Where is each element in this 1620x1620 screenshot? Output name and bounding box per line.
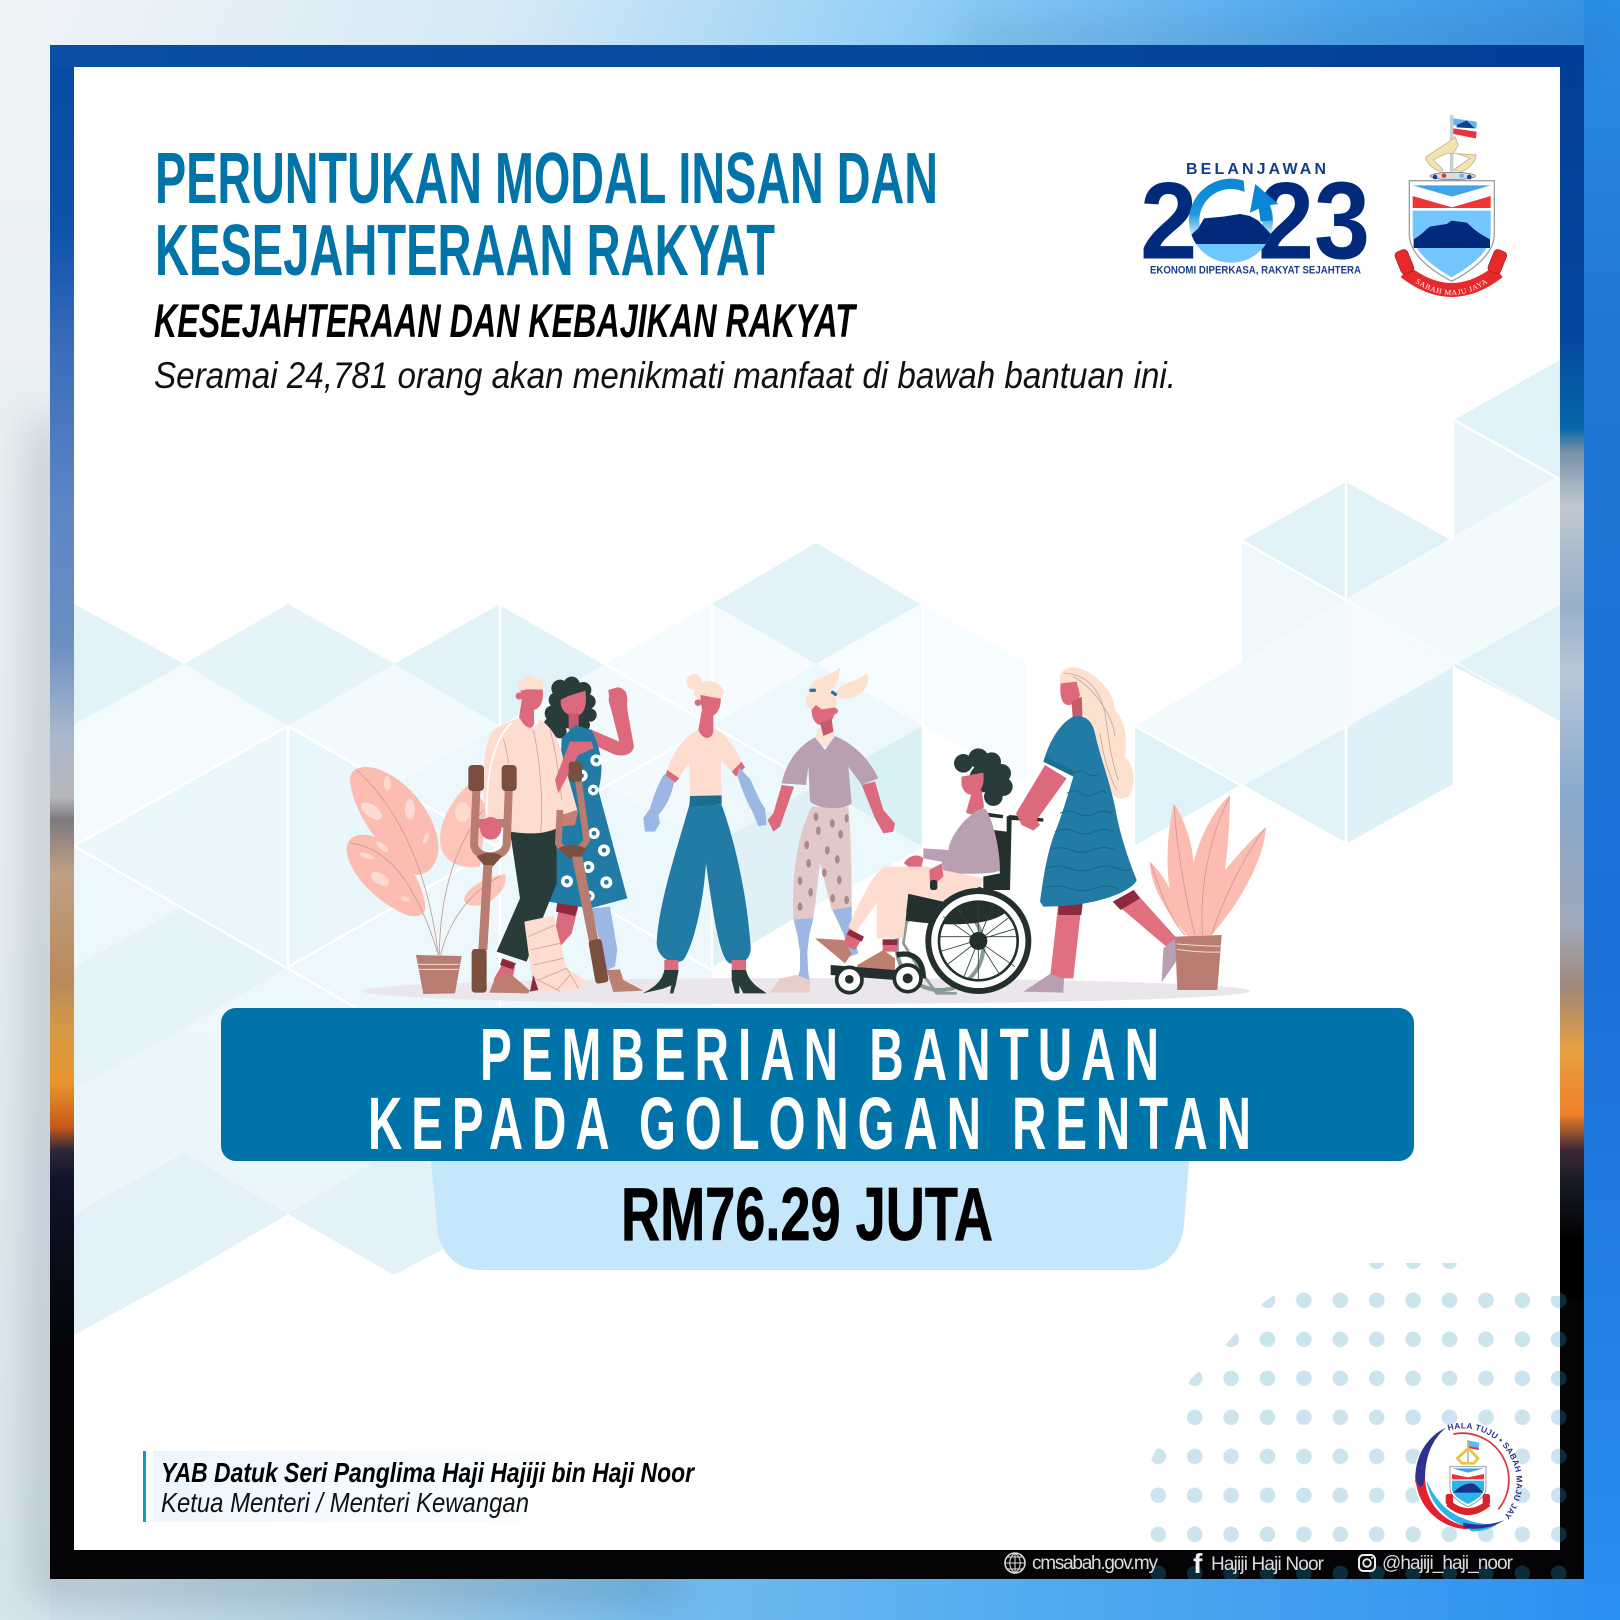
- footer: website: cmsabah.gov.my: [1032, 1553, 1158, 1574]
- dot pattern: [1140, 1263, 1560, 1550]
- signature block: [143, 1451, 696, 1522]
- illustration: left plant: [347, 767, 506, 994]
- title: KESEJAHTERAAN RAKYAT: [155, 211, 775, 291]
- logo: Sabah coat of arms: [1394, 115, 1507, 297]
- hexagon pattern background: [74, 360, 1560, 1335]
- logo: Belanjawan 2023: BELANJAWAN: [1186, 161, 1326, 178]
- title: PERUNTUKAN MODAL INSAN DAN: [155, 139, 938, 219]
- illustration: woman with prosthetic arms: [643, 674, 767, 993]
- footer: instagram: @hajiji_haji_noor: [1382, 1553, 1514, 1574]
- illustration: woman pushing wheelchair: [1016, 667, 1184, 993]
- logo: Hala Tuju Sabah Maju Jaya: HALA TUJU • SABAH MAJU JAYA: [1448, 1422, 1522, 1520]
- heading banner: [221, 1008, 1414, 1165]
- footer: facebook: Hajiji Haji Noor: [1211, 1554, 1325, 1575]
- footer: facebook: f: [1193, 1548, 1203, 1579]
- heading banner: PEMBERIAN BANTUAN: [480, 1013, 1168, 1096]
- logo: Belanjawan 2023: 23: [1258, 160, 1370, 282]
- signature block: YAB Datuk Seri Panglima Haji Hajiji bin Haji Noor: [161, 1457, 696, 1488]
- amount: RM76.29 JUTA: [621, 1172, 993, 1256]
- illustration: woman waving with prosthetic leg: [544, 677, 643, 992]
- title: [155, 139, 938, 291]
- illustration: woman with prosthetic legs: [768, 667, 895, 993]
- footer: facebook: [1193, 1548, 1325, 1579]
- description: Seramai 24,781 orang akan menikmati manfaat di bawah bantuan ini.: [154, 355, 1176, 396]
- logo: Belanjawan 2023: 2: [1140, 160, 1197, 282]
- illustration: man with crutches and leg cast: [468, 676, 609, 993]
- illustration: woman in wheelchair: [815, 748, 1043, 993]
- signature block: Ketua Menteri / Menteri Kewangan: [161, 1487, 529, 1518]
- amount panel: [430, 1150, 1190, 1270]
- ground shadow: [362, 978, 1250, 1004]
- subtitle: KESEJAHTERAAN DAN KEBAJIKAN RAKYAT: [154, 294, 858, 347]
- logo: Hala Tuju Sabah Maju Jaya: [1415, 1422, 1522, 1532]
- logo: Sabah coat of arms: SABAH MAJU JAYA: [1416, 278, 1488, 296]
- logo: Belanjawan 2023: EKONOMI DIPERKASA, RAKYAT SEJAHTERA: [1150, 264, 1361, 276]
- illustration: right plant: [1150, 795, 1266, 990]
- logo: Belanjawan 2023: [1144, 163, 1366, 276]
